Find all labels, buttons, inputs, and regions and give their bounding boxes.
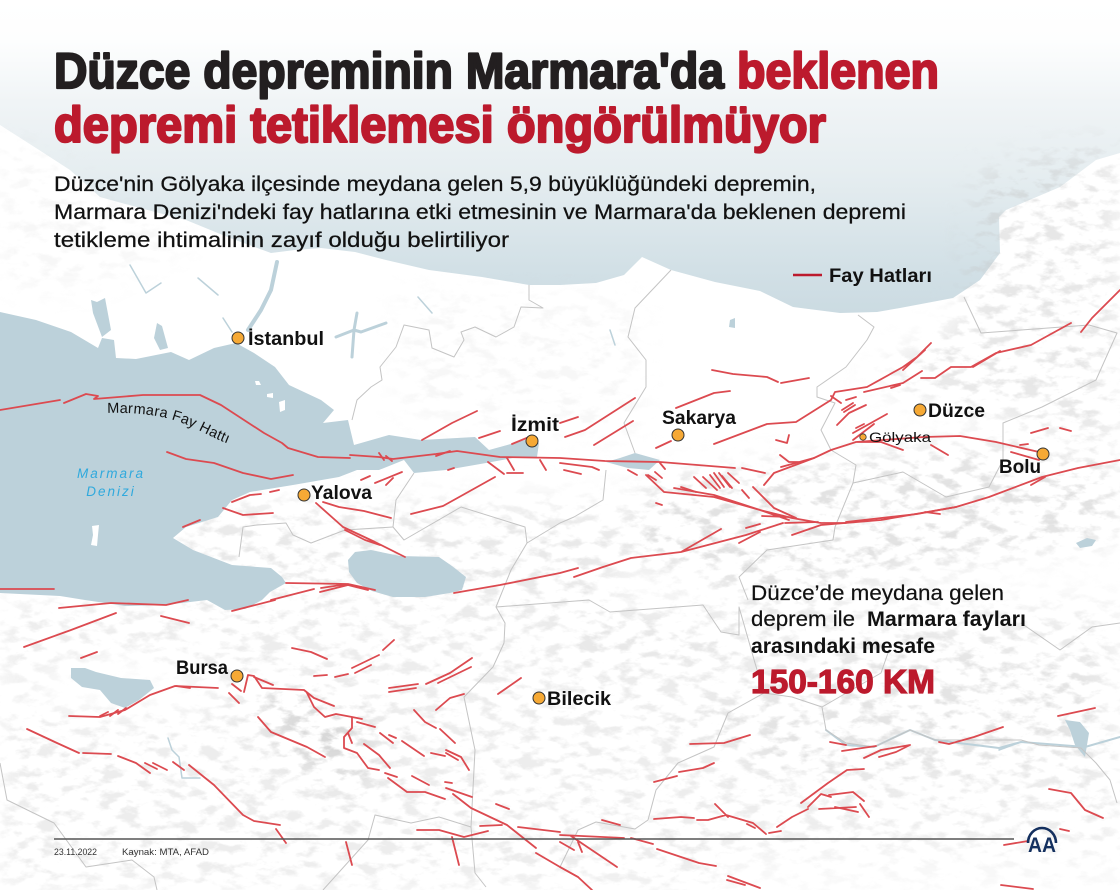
north Anatolian faults bbox=[560, 370, 809, 448]
footer rule bbox=[54, 838, 1014, 840]
callout: distance: deprem ile bbox=[751, 608, 855, 631]
lakes bbox=[71, 298, 1096, 757]
title: Düzce depreminin Marmara'da bbox=[54, 43, 725, 99]
city: Gölyaka: Gölyaka bbox=[869, 429, 931, 445]
fault label: Marmara Fay Hattı: Marmara Fay Hattı bbox=[108, 402, 229, 443]
Sapanca lake bbox=[606, 453, 660, 470]
callout: distance: Düzce’de meydana gelen bbox=[751, 582, 1004, 605]
legend: fault lines: Fay Hatları bbox=[829, 266, 932, 287]
sea label: Marmara Denizi bbox=[77, 466, 145, 499]
Marmara fault bbox=[0, 394, 765, 473]
city: Düzce: Düzce bbox=[928, 401, 985, 422]
sea label: Marmara Denizi: Marmara bbox=[77, 466, 145, 481]
title: beklenen bbox=[737, 43, 939, 99]
legend: fault lines bbox=[793, 266, 932, 287]
city: İzmit bbox=[511, 415, 560, 447]
background: Black Sea gradient bbox=[0, 0, 1120, 320]
footer: date: 23.11.2022 bbox=[54, 847, 97, 858]
sea label: Marmara Denizi: Denizi bbox=[86, 484, 136, 499]
city: Sakarya: Sakarya bbox=[662, 408, 736, 429]
central and eastern faults bbox=[654, 735, 910, 782]
intro text bbox=[54, 173, 906, 252]
city markers and labels bbox=[176, 329, 1049, 710]
icon: AA logo: AA bbox=[1028, 834, 1056, 857]
callout: distance bbox=[751, 582, 1026, 700]
city: Bilecik: Bilecik bbox=[547, 689, 611, 710]
Yalova and Gemlik faults bbox=[183, 490, 279, 527]
footer: source: Kaynak: MTA, AFAD bbox=[122, 847, 209, 858]
title: depremi tetiklemesi öngörülmüyor bbox=[54, 97, 826, 153]
callout: distance: arasındaki mesafe bbox=[751, 635, 935, 658]
city: İzmit: İzmit bbox=[511, 415, 560, 436]
city: Sakarya bbox=[662, 408, 736, 441]
Bursa faults bbox=[69, 686, 218, 717]
title bbox=[54, 43, 939, 153]
callout: distance: Marmara fayları bbox=[867, 608, 1026, 631]
fault lines bbox=[0, 290, 1120, 890]
city: İstanbul: İstanbul bbox=[248, 329, 324, 350]
intro text: tetikleme ihtimalinin zayıf olduğu belirtiliyor bbox=[54, 229, 509, 252]
distance figure: 150-160 KM bbox=[751, 663, 935, 700]
rivers and reservoirs bbox=[130, 262, 1120, 778]
province borders bbox=[0, 270, 1120, 890]
intro text: Marmara Denizi'ndeki fay hatlarına etki etmesinin ve Marmara'da beklenen depremi bbox=[54, 201, 906, 224]
city: Bolu bbox=[999, 448, 1049, 478]
Marmara Sea bbox=[0, 312, 539, 610]
Iznik lake bbox=[348, 550, 466, 597]
intro text: Düzce'nin Gölyaka ilçesinde meydana gelen 5,9 büyüklüğündeki depremin, bbox=[54, 173, 816, 196]
Ulubat lake bbox=[71, 668, 154, 708]
city: Bursa: Bursa bbox=[176, 658, 228, 679]
city: Yalova: Yalova bbox=[311, 483, 372, 504]
south Marmara faults bbox=[24, 600, 275, 658]
city: Bolu: Bolu bbox=[999, 457, 1041, 478]
